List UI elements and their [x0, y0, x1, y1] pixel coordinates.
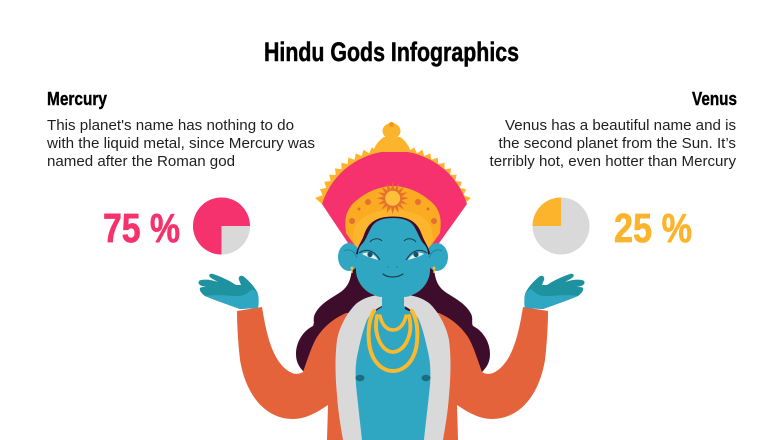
hairline — [356, 216, 430, 262]
number: 25 %: 25 % — [614, 205, 692, 251]
heading: Venus: Venus — [692, 89, 737, 109]
text block: Mercury description: with the liquid metal, since Mercury was — [46, 136, 315, 152]
crown serrated gold edge — [315, 144, 471, 204]
nose — [387, 266, 398, 268]
gold necklaces — [369, 311, 417, 371]
text block: Venus description: terribly hot, even hotter than Mercury — [490, 154, 737, 170]
pie chart: 75 percent — [193, 198, 250, 254]
text block: Mercury description: This planet's name has nothing to do — [47, 118, 294, 134]
orange coat and arms — [237, 307, 548, 440]
number: 75 %: 75 % — [103, 205, 180, 251]
hands — [198, 274, 585, 309]
torso — [348, 290, 438, 440]
crown — [315, 122, 471, 250]
eyebrows — [370, 239, 416, 242]
crown orange band — [345, 186, 441, 250]
face — [356, 218, 430, 297]
white fur collar — [336, 295, 450, 440]
text block: Mercury description: named after the Roman god — [47, 154, 235, 170]
nipples — [356, 375, 430, 381]
panel: Venus — [490, 89, 737, 254]
crown dots — [349, 199, 437, 224]
crown dome — [373, 122, 411, 152]
hair — [296, 262, 490, 372]
sun ornament — [377, 182, 409, 214]
pie chart: 25 percent — [532, 198, 590, 254]
crown inner band — [353, 210, 433, 250]
panel: Mercury — [46, 89, 315, 254]
mouth — [383, 274, 403, 277]
text block: Venus description: Venus has a beautiful name and is — [505, 118, 736, 134]
text block: Mercury description — [46, 118, 315, 170]
text block: Venus description: the second planet from the Sun. It’s — [498, 136, 736, 152]
text block: Venus description — [490, 118, 737, 170]
crown pink fan — [322, 151, 467, 246]
eyes — [359, 250, 427, 260]
title: Hindu Gods Infographics — [264, 37, 519, 67]
illustration: Hindu god figure — [198, 122, 585, 440]
heading: Mercury: Mercury — [47, 89, 107, 109]
ears — [338, 243, 448, 273]
